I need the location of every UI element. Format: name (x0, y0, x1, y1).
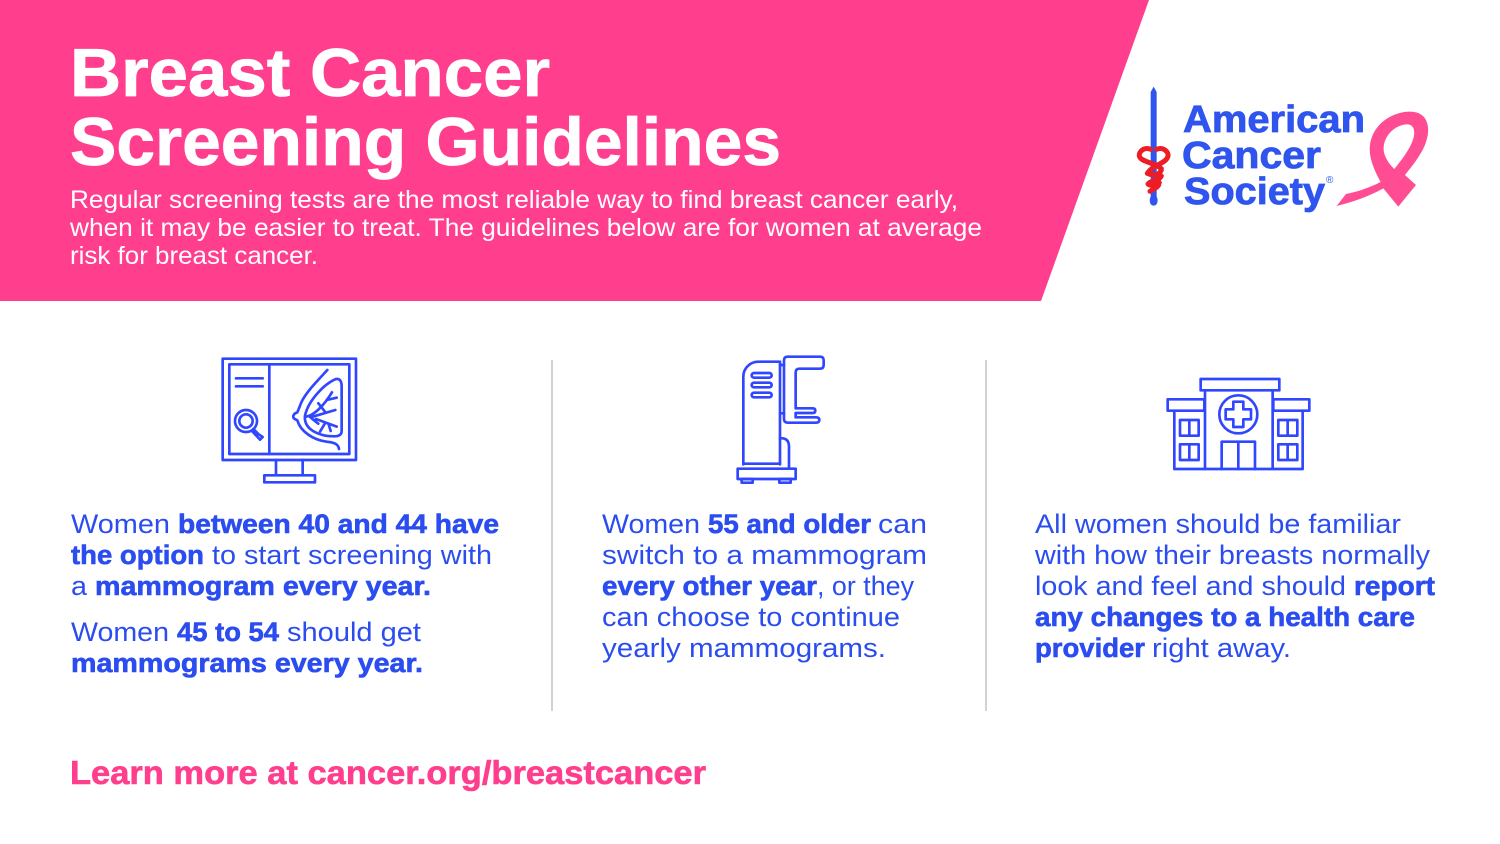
footer call to action: Learn more at cancer.org/breastcancer (70, 754, 706, 791)
text: women 45 to 54 (71, 617, 423, 678)
text: women 40 to 44: a (71, 571, 88, 601)
text: report changes: with how their breasts normally (1034, 540, 1431, 570)
text: women 45 to 54: should get (287, 617, 422, 647)
text: women 55 and older: Women (602, 509, 700, 539)
text: women 55 and older: , or they (817, 571, 914, 601)
text: women 45 to 54: Women (71, 617, 169, 647)
text: women 55 and older: every other year (602, 571, 817, 601)
text: women 55 and older: 55 and older (708, 509, 872, 539)
text: report changes: any changes to a health care (1035, 602, 1415, 632)
logo: American Cancer Society (1139, 87, 1428, 213)
icon: sword and snake (1139, 87, 1168, 206)
intro text (69, 186, 982, 270)
text: women 40 to 44: mammogram every year. (95, 571, 431, 601)
text: women 40 to 44: to start screening with (212, 540, 492, 570)
text: women 40 to 44: the option (71, 540, 204, 570)
text: report changes: report (1354, 571, 1435, 601)
text: report changes: look and feel and should (1035, 571, 1346, 601)
text: women 55 and older: can (878, 509, 927, 539)
text: women 55 and older: switch to a mammogram (602, 540, 927, 570)
logo wordmark: American (1183, 99, 1365, 141)
intro text: when it may be easier to treat. The guidelines below are for women at average (69, 214, 982, 242)
pink header banner (0, 0, 1149, 301)
icon: hospital (1168, 379, 1309, 469)
icon: mammography machine (738, 357, 824, 483)
logo wordmark (1182, 99, 1365, 213)
intro text: risk for breast cancer. (70, 242, 318, 270)
panel: column 2 (602, 357, 927, 663)
text: women 45 to 54: mammograms every year. (71, 648, 423, 678)
text: women 55 and older: yearly mammograms. (602, 633, 886, 663)
icon: monitor with mammogram (223, 359, 356, 482)
logo wordmark: ® (1326, 175, 1334, 186)
panel: column 1 (71, 359, 499, 678)
text: report changes: provider (1035, 633, 1145, 663)
text: women 55 and older: can choose to continue (602, 602, 900, 632)
text: women 40 to 44 (71, 509, 499, 601)
text: women 40 to 44: between 40 and 44 have (178, 509, 499, 539)
text: women 55 and older (602, 509, 927, 663)
text: women 40 to 44: Women (71, 509, 170, 539)
title (70, 35, 781, 180)
title: Screening Guidelines (70, 104, 781, 180)
text: report changes: right away. (1152, 633, 1291, 663)
title: Breast Cancer (70, 35, 550, 111)
logo wordmark: Cancer (1182, 135, 1321, 177)
text: report changes: All women should be familiar (1035, 509, 1401, 539)
panel: column 3 (1034, 379, 1435, 663)
intro text: Regular screening tests are the most reliable way to find breast cancer early, (70, 186, 958, 214)
text: women 45 to 54: 45 to 54 (177, 617, 279, 647)
icon: pink ribbon (1337, 112, 1428, 207)
logo wordmark: Society (1184, 171, 1325, 213)
text: report changes (1034, 509, 1435, 663)
